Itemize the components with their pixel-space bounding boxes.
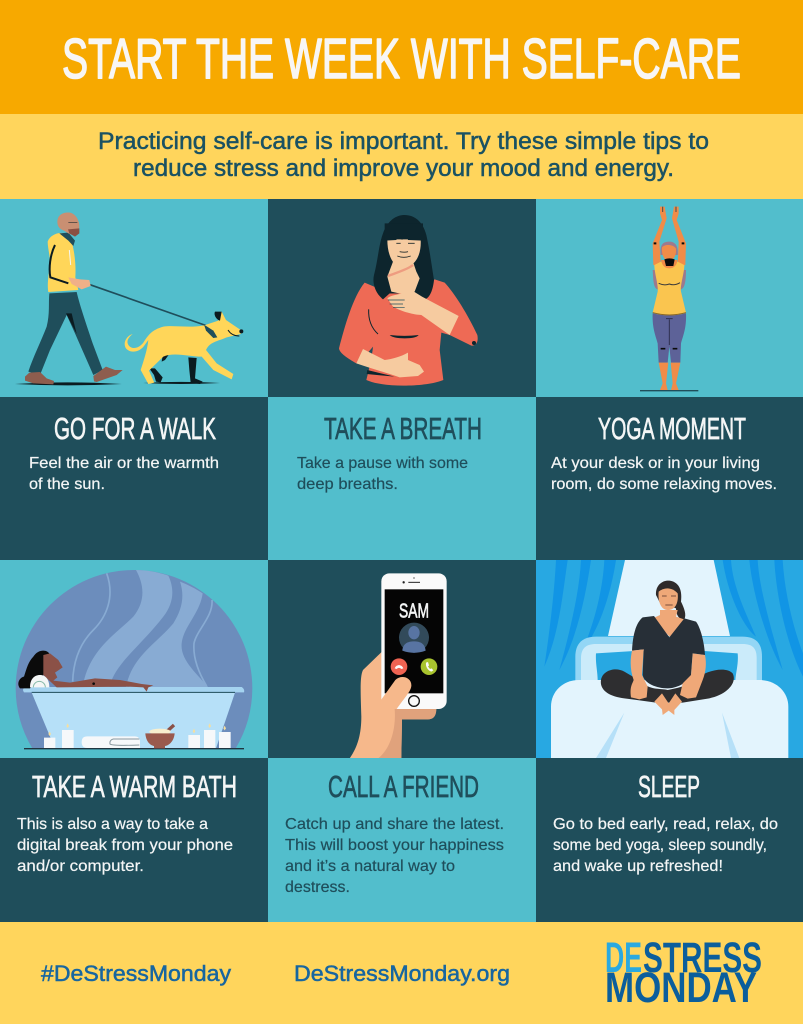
icon: yoga figure — [640, 207, 698, 391]
body text: Go to bed early, read, relax, do — [553, 816, 778, 833]
caller name: SAM — [399, 599, 429, 622]
heading: TAKE A WARM BATH — [32, 769, 237, 804]
body text: Catch up and share the latest. — [285, 816, 504, 833]
logo: MONDAY — [605, 964, 757, 1012]
panel: call a friend illustration — [268, 560, 536, 758]
icon: round backdrop with steam — [16, 570, 252, 748]
footer band — [0, 922, 803, 1024]
panel: sleep text — [536, 758, 803, 922]
body text — [17, 816, 233, 875]
body text: This will boost your happiness — [285, 837, 504, 854]
icon: thumb — [380, 677, 411, 709]
heading: TAKE A BREATH — [324, 411, 482, 446]
body text: deep breaths. — [297, 476, 398, 493]
body text: and it’s a natural way to — [285, 858, 455, 875]
icon: candles, towel and bowl — [44, 723, 231, 748]
panel: call a friend text — [268, 758, 536, 922]
intro band — [0, 114, 803, 199]
website: DeStressMonday.org — [294, 961, 510, 986]
heading: CALL A FRIEND — [328, 769, 479, 804]
body text: At your desk or in your living — [551, 455, 760, 472]
logo — [605, 934, 762, 1012]
body text: destress. — [285, 879, 350, 896]
body text: of the sun. — [29, 476, 105, 493]
body text: This is also a way to take a — [17, 816, 208, 833]
icon: bed — [551, 637, 788, 758]
body text — [285, 816, 504, 896]
panel: go for a walk text — [0, 397, 268, 560]
body text — [297, 455, 468, 493]
icon: hand — [350, 651, 436, 758]
panel: go for a walk illustration — [0, 199, 268, 397]
icon: curtains and window — [544, 560, 803, 677]
icon: walking man — [25, 212, 123, 384]
icon: dog — [125, 312, 243, 384]
icon: leash — [90, 285, 207, 326]
panel: yoga moment text — [536, 397, 803, 560]
body text: room, do some relaxing moves. — [551, 476, 777, 493]
intro text — [98, 128, 709, 182]
icon: woman in bath — [18, 651, 153, 692]
header banner — [0, 0, 803, 114]
body text — [553, 816, 778, 875]
body text: Take a pause with some — [297, 455, 468, 472]
panel: take a breath illustration — [268, 199, 536, 397]
panel: take a breath text — [268, 397, 536, 560]
heading: GO FOR A WALK — [54, 411, 216, 446]
hashtag: #DeStressMonday — [41, 961, 231, 986]
heading: SLEEP — [638, 769, 700, 804]
intro text: reduce stress and improve your mood and energy. — [133, 155, 674, 182]
ground shadows — [15, 382, 220, 385]
body text — [29, 455, 219, 493]
panel: yoga moment illustration — [536, 199, 803, 397]
body text: digital break from your phone — [17, 837, 233, 854]
body text: some bed yoga, sleep soundly, — [553, 837, 767, 854]
intro text: Practicing self-care is important. Try these simple tips to — [98, 128, 709, 155]
icon: bathtub — [23, 687, 244, 749]
logo: DE — [605, 934, 642, 982]
panel: warm bath illustration — [0, 560, 268, 758]
icon: smartphone — [381, 573, 447, 709]
panel: warm bath text — [0, 758, 268, 922]
icon: woman breathing — [339, 215, 478, 386]
panel: sleep illustration — [536, 560, 803, 758]
icon: meditating woman — [601, 581, 734, 715]
body text: and wake up refreshed! — [553, 858, 723, 875]
body text — [551, 455, 777, 493]
body text: and/or computer. — [17, 858, 144, 875]
body text: Feel the air or the warmth — [29, 455, 219, 472]
